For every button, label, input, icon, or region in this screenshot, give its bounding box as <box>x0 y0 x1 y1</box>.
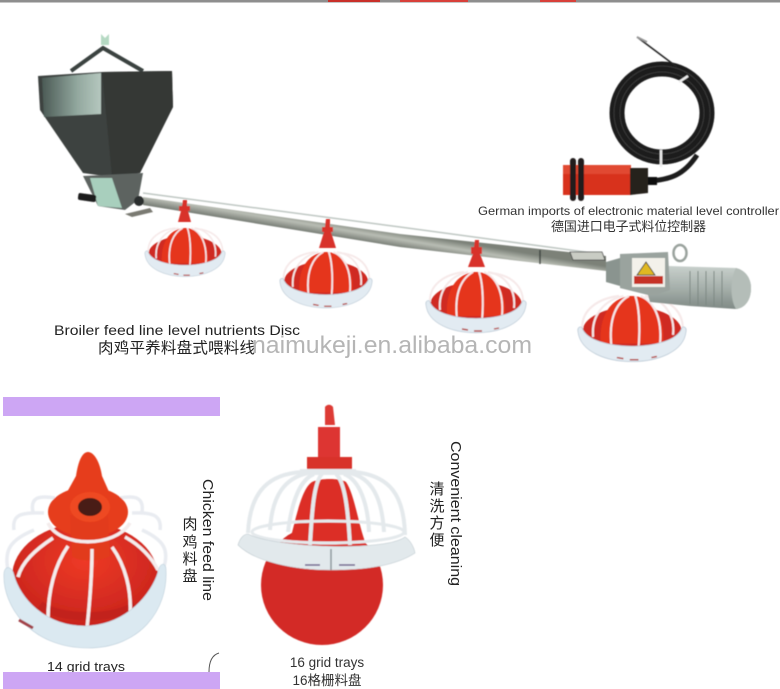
vertical caption: convenient cleaning: 洗 <box>429 498 445 515</box>
caption: feed line: 肉鸡平养料盘式喂料线 <box>98 338 255 357</box>
vertical caption: chicken feed line: 肉 <box>182 516 198 533</box>
caption: feed line: Broiler feed line level nutrients Disc <box>54 322 300 338</box>
feed pipe <box>143 193 606 271</box>
sensor body <box>563 158 657 201</box>
purple bar bottom <box>3 672 220 689</box>
hopper <box>38 34 173 217</box>
feeder: 16 grid tray <box>238 405 415 645</box>
illustration: level controller <box>563 37 710 201</box>
vertical caption: convenient cleaning: 便 <box>429 532 445 549</box>
cable coil <box>614 37 710 181</box>
caption: level controller <box>478 204 779 234</box>
vertical caption: convenient cleaning: 清 <box>429 481 445 498</box>
vertical caption: chicken feed line: 盘 <box>182 567 198 585</box>
vertical caption: convenient cleaning: 方 <box>429 515 445 532</box>
vertical caption: chicken feed line <box>182 479 216 601</box>
vertical caption: convenient cleaning: Convenient cleaning <box>447 441 464 586</box>
hanger cones <box>178 200 485 267</box>
top strip <box>0 0 780 2</box>
feeder 3 <box>426 272 526 333</box>
caption: level controller: German imports of electronic material level controller <box>478 204 779 218</box>
vertical caption: chicken feed line: 料 <box>182 551 198 568</box>
gear motor <box>606 245 751 309</box>
feeder: 14 grid tray <box>4 452 166 648</box>
icon fragment <box>209 653 219 672</box>
caption: 16 grid trays: 16 grid trays <box>290 655 364 670</box>
vertical caption: convenient cleaning <box>429 441 464 586</box>
purple bar top <box>3 397 220 416</box>
caption: 16 grid trays <box>290 655 364 688</box>
caption: level controller: 德国进口电子式料位控制器 <box>551 219 706 234</box>
vertical caption: chicken feed line: Chicken feed line <box>199 479 216 601</box>
feeder 4 <box>578 296 686 362</box>
feeder 2 <box>280 252 372 308</box>
caption: 14 grid trays: 14 grid trays <box>47 659 126 674</box>
vertical caption: chicken feed line: 鸡 <box>182 534 198 551</box>
caption: feed line <box>54 322 300 357</box>
illustration: feed line assembly <box>38 34 751 362</box>
feeder 1 <box>145 228 225 277</box>
watermark: naimukeji.en.alibaba.com <box>252 332 532 359</box>
caption: 16 grid trays: 16格栅料盘 <box>292 672 362 688</box>
